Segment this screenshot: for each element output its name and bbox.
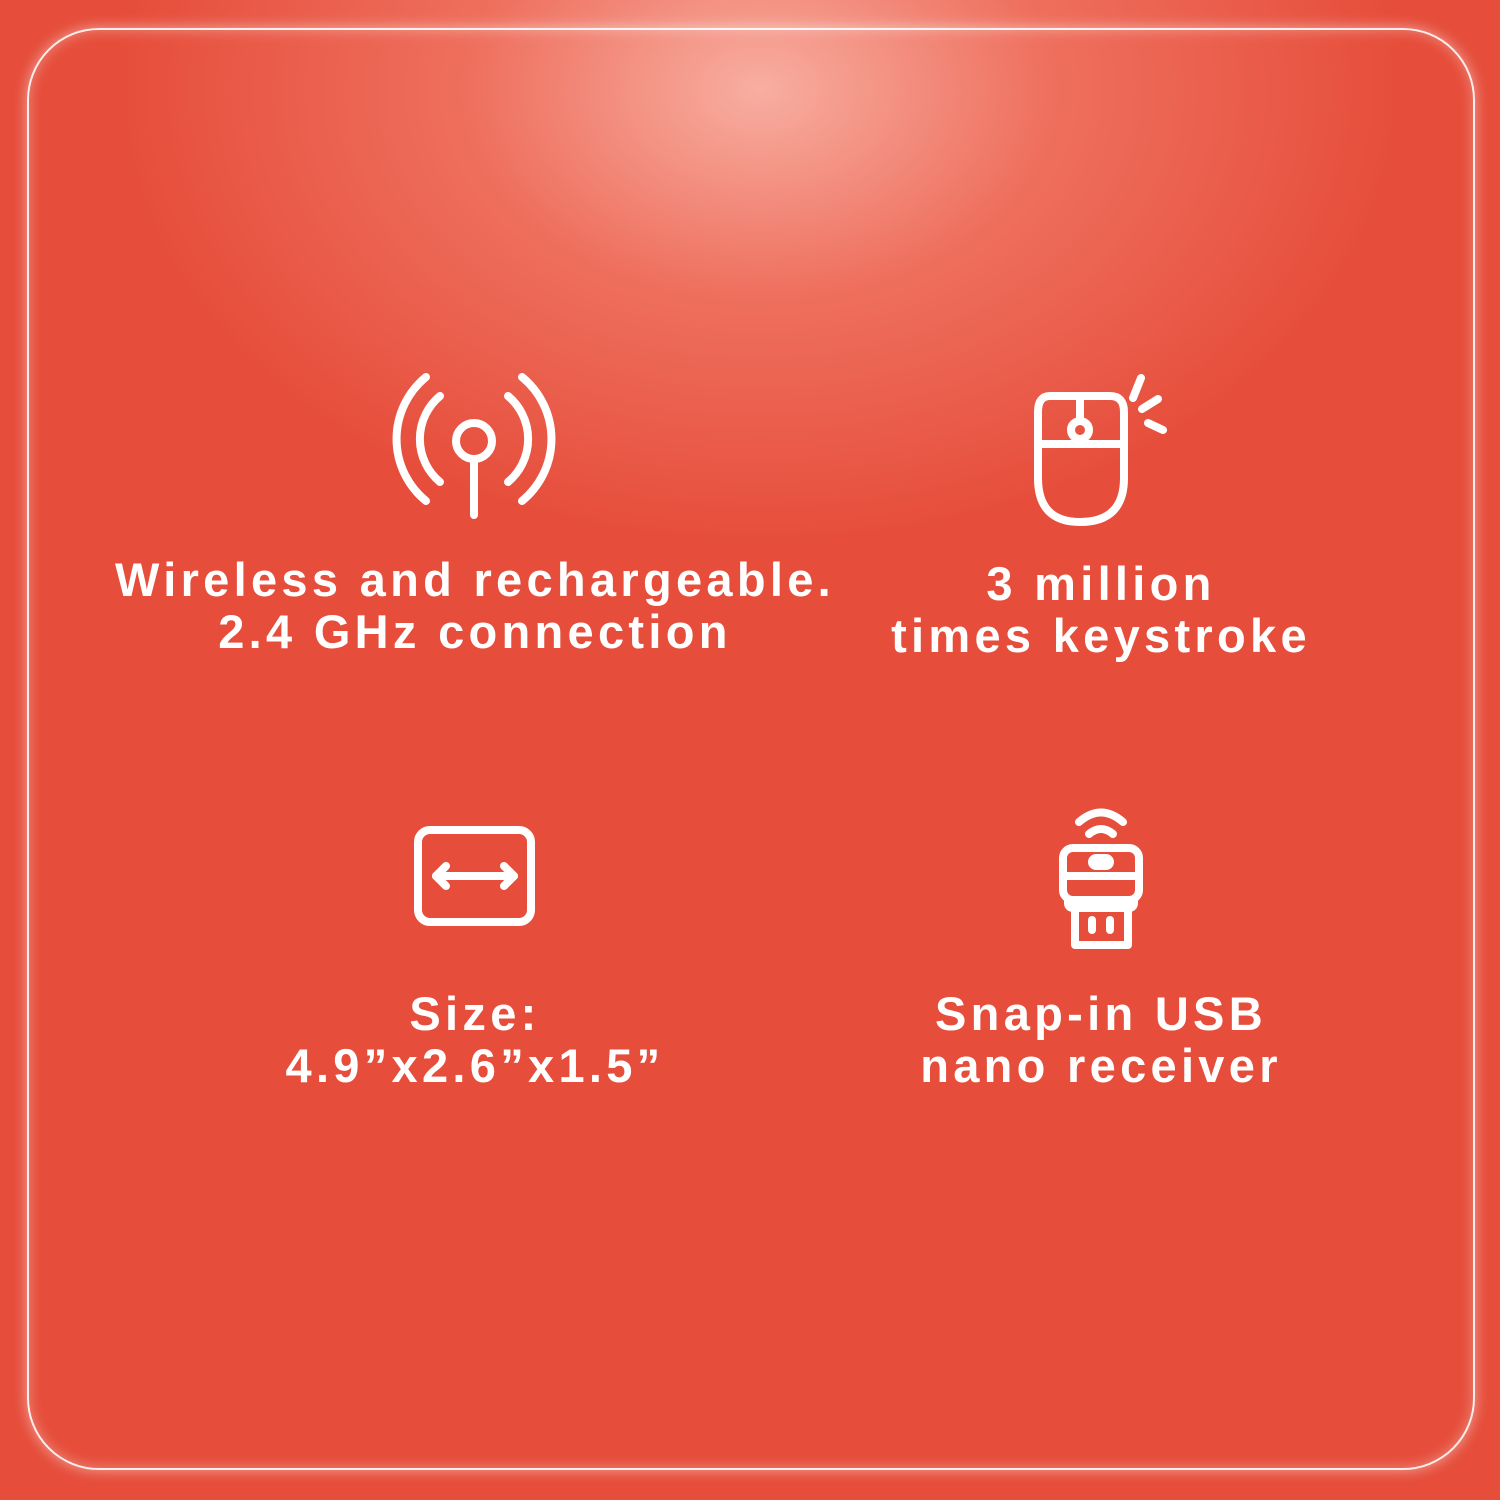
text: wireless: Wireless and rechargeable. (115, 553, 835, 606)
text: keystroke: times keystroke (891, 609, 1311, 662)
text: wireless: 2.4 GHz connection (218, 605, 732, 658)
icon: mouse click (1038, 378, 1163, 522)
text: keystroke (891, 557, 1311, 662)
text: usb: nano receiver (920, 1039, 1282, 1092)
icon: wireless antenna (397, 377, 551, 515)
icon: usb receiver (1063, 812, 1139, 945)
text: usb (920, 987, 1282, 1092)
icon: size (418, 830, 531, 922)
text: size (286, 987, 664, 1092)
text: keystroke: 3 million (986, 557, 1216, 610)
text: size: 4.9”x2.6”x1.5” (286, 1039, 664, 1092)
text: usb: Snap-in USB (935, 987, 1267, 1040)
text: wireless (115, 553, 835, 658)
text: size: Size: (409, 987, 541, 1040)
